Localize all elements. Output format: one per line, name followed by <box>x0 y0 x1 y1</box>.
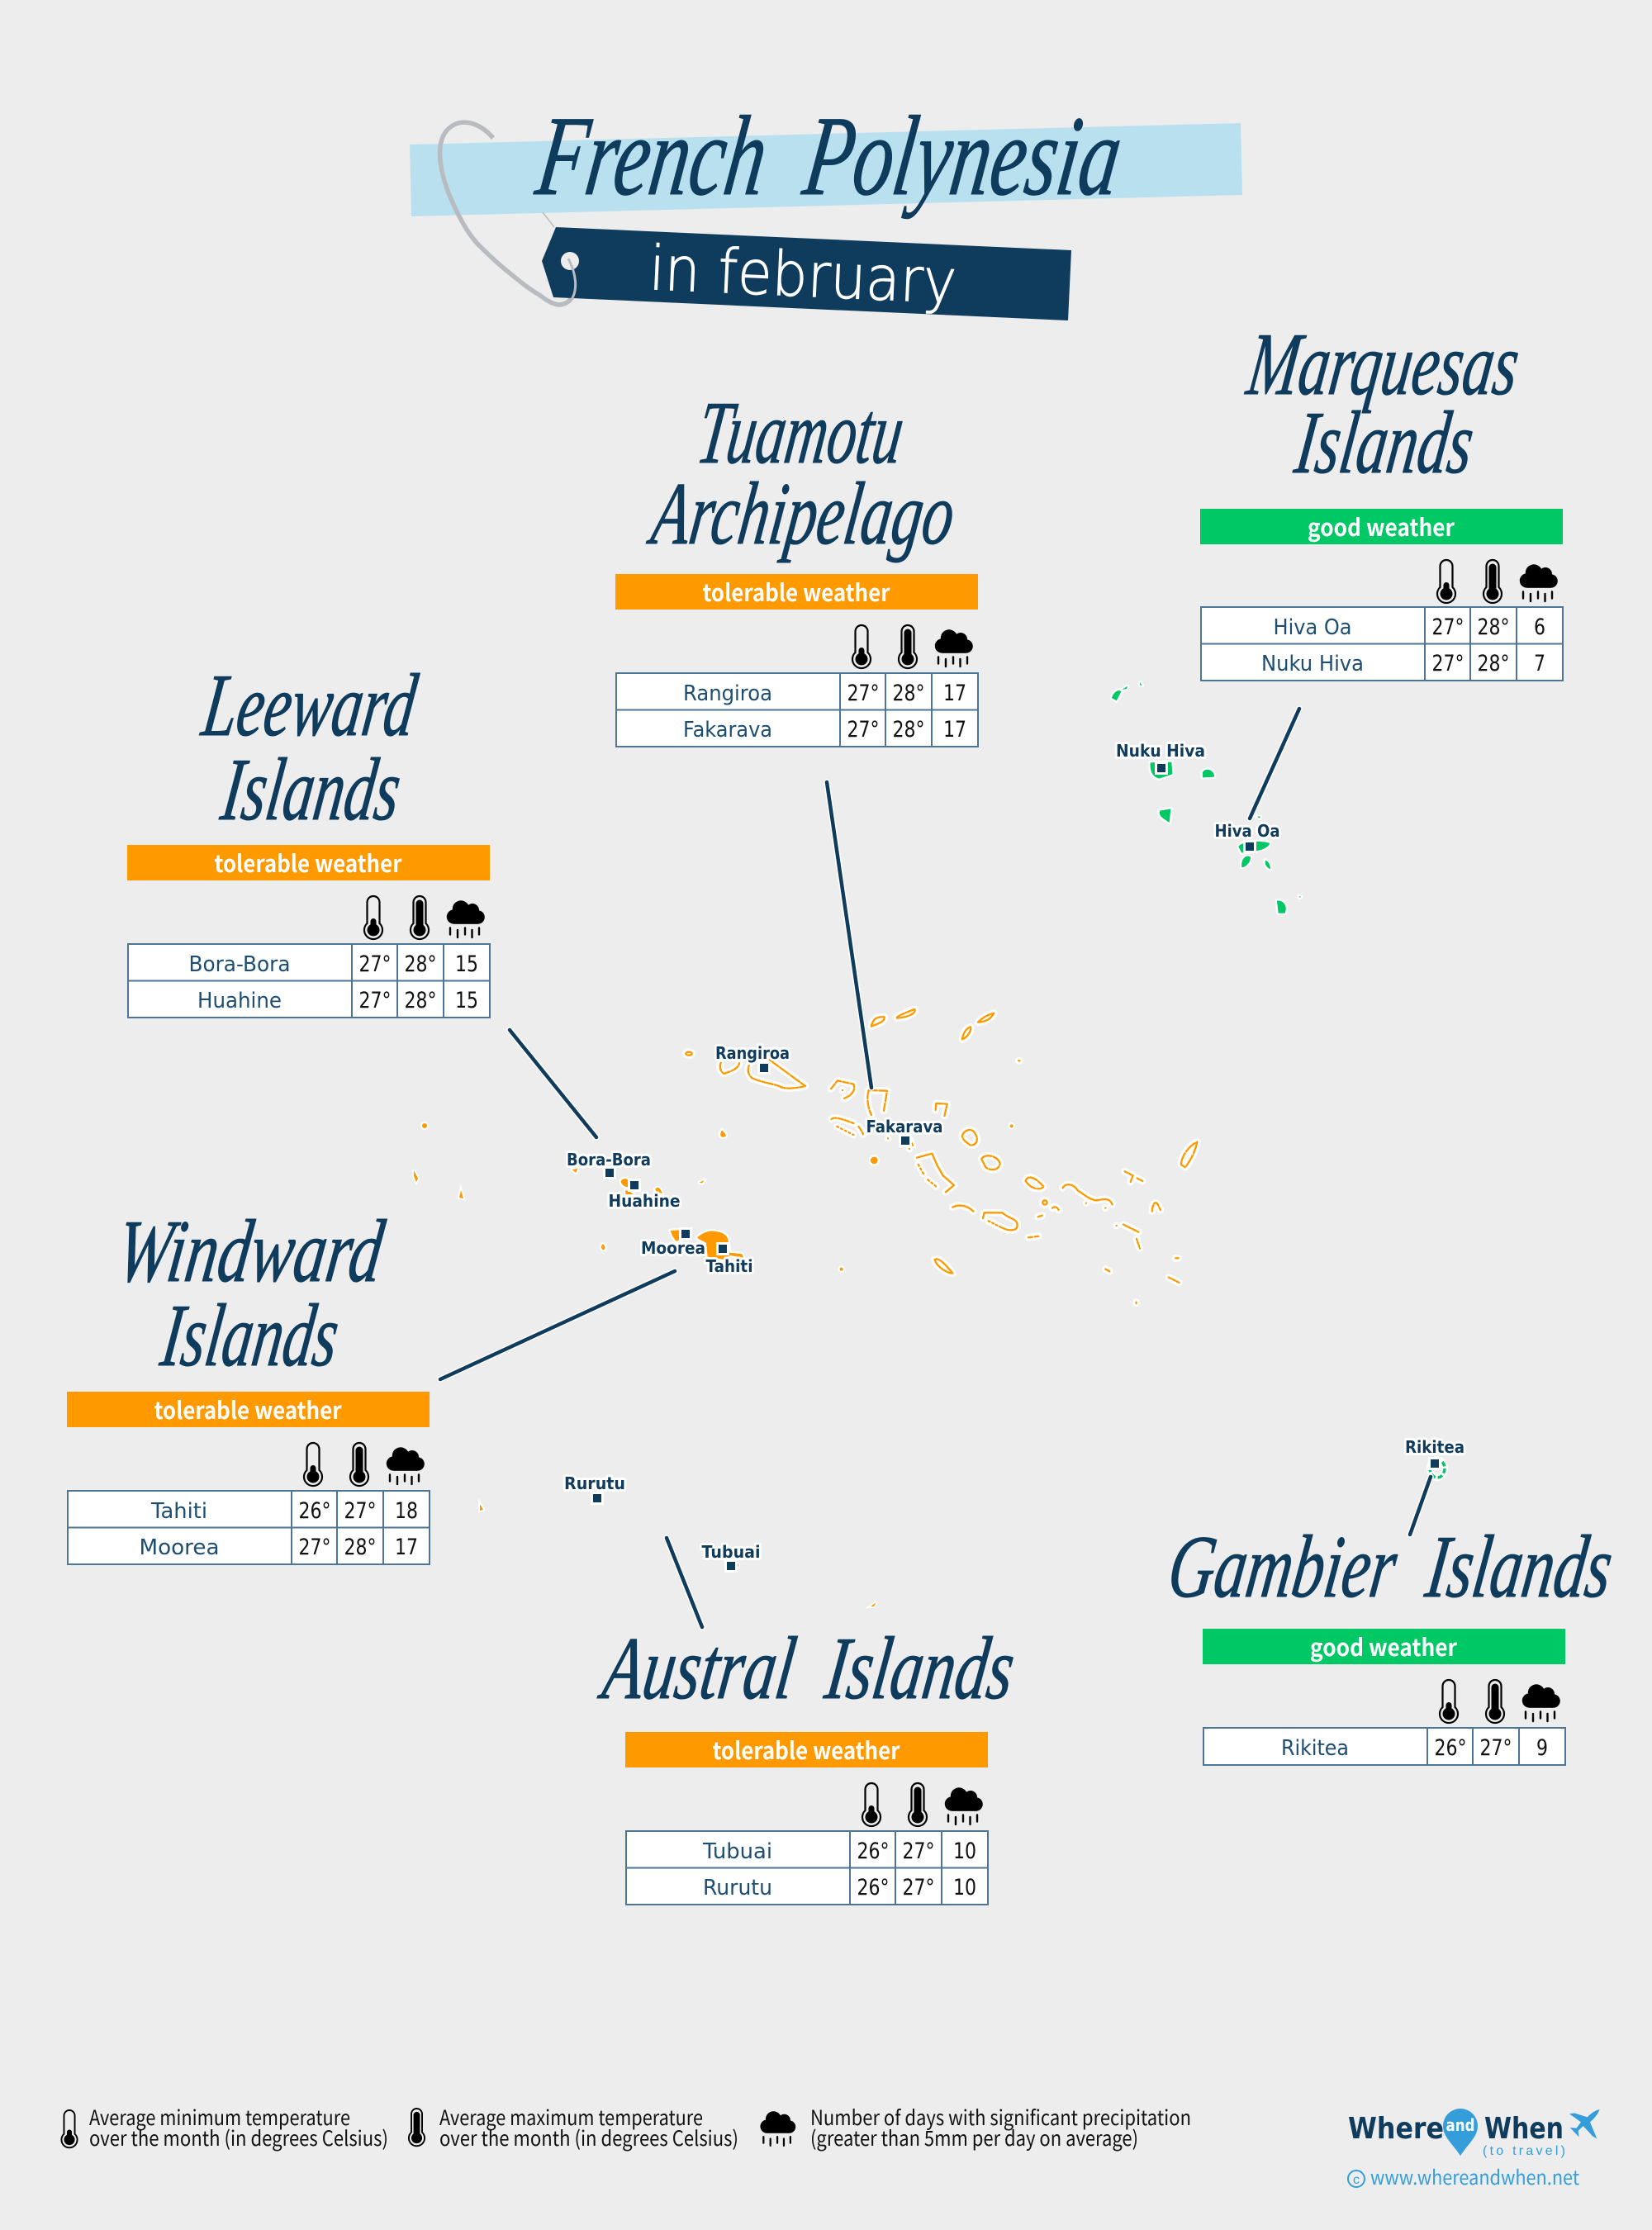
weather table: Rurutu <box>703 1876 772 1900</box>
heading: Tuamotu Archipelago <box>643 383 961 563</box>
leader line: Tuamotu <box>827 782 871 1088</box>
weather table: 27° <box>358 951 392 977</box>
icons: min temp, max temp, rain days <box>1440 1680 1560 1723</box>
logo: Where and When <box>1348 2109 1600 2190</box>
weather table: 27° <box>1480 1735 1512 1761</box>
logo: Where and When: and <box>1446 2115 1475 2135</box>
weather table: 27° <box>1432 614 1464 640</box>
map marker: Tahiti <box>705 1245 753 1276</box>
heading: Marquesas Islands: Islands <box>1289 393 1479 492</box>
heading: Windward Islands: Windward <box>112 1202 390 1301</box>
weather table: 10 <box>953 1839 976 1864</box>
weather banner <box>615 574 978 610</box>
icon: map pin <box>1443 2109 1478 2156</box>
subtitle tag <box>542 227 1071 320</box>
weather table <box>128 944 490 1018</box>
weather banner <box>625 1732 988 1767</box>
map marker: Rikitea: Rikitea <box>1405 1437 1464 1457</box>
map marker: Bora-Bora <box>567 1150 651 1177</box>
heading: Leeward Islands: Islands <box>216 740 406 839</box>
panel: Leeward Islands <box>127 656 490 1018</box>
map: Gambier islands <box>1430 1459 1445 1478</box>
weather banner: tolerable weather <box>712 1732 900 1767</box>
weather table <box>68 1491 430 1564</box>
map marker: Tubuai <box>702 1542 760 1570</box>
legend text: maximum temperature: over the month (in degrees Celsius) <box>439 2123 738 2152</box>
map marker: Rangiroa: Rangiroa <box>715 1043 790 1063</box>
icons: min temp, max temp, rain days <box>852 625 973 668</box>
leader line: Windward <box>440 1271 675 1379</box>
weather banner: tolerable weather <box>702 574 890 609</box>
map marker: Huahine: Huahine <box>608 1191 681 1211</box>
weather table: 18 <box>395 1498 418 1524</box>
heading: Tuamotu Archipelago: Archipelago <box>643 464 961 563</box>
weather banner: tolerable weather <box>215 845 402 880</box>
weather table: Bora-Bora <box>188 952 291 977</box>
legend text: precipitation days: (greater than 5mm per day on average) <box>810 2123 1138 2152</box>
leader line: Gambier <box>1410 1477 1431 1535</box>
title band <box>410 123 1242 216</box>
icons: min temp, max temp, rain days <box>304 1443 425 1486</box>
logo: Where and When: (to travel) <box>1483 2144 1565 2158</box>
map marker: Tahiti: Tahiti <box>705 1256 753 1276</box>
weather table <box>626 1831 988 1905</box>
website: c <box>1353 2173 1360 2187</box>
weather banner <box>1200 509 1563 544</box>
legend text: minimum temperature <box>89 2102 388 2152</box>
weather table: Tahiti <box>150 1499 207 1524</box>
legend text: maximum temperature <box>439 2102 738 2152</box>
leader line: Austral <box>667 1538 702 1627</box>
legend text: minimum temperature: over the month (in degrees Celsius) <box>89 2123 388 2152</box>
map marker: Rikitea <box>1405 1437 1464 1468</box>
map marker: Rurutu <box>564 1473 625 1502</box>
weather table: 27° <box>344 1498 377 1524</box>
weather table: 15 <box>455 988 478 1013</box>
weather table: 27° <box>902 1875 935 1900</box>
weather banner: tolerable weather <box>154 1392 342 1426</box>
map marker: Nuku Hiva <box>1116 741 1205 772</box>
legend <box>61 2102 1191 2152</box>
map: Tuamotu atolls and islands <box>686 1009 1197 1303</box>
legend text: precipitation days <box>810 2102 1191 2152</box>
weather table: 27° <box>358 988 392 1013</box>
title: French Polynesia <box>529 93 1129 219</box>
weather table: 28° <box>892 681 925 706</box>
weather table: 6 <box>1534 614 1545 640</box>
weather table: 28° <box>892 717 925 743</box>
weather banner: good weather <box>1308 509 1455 543</box>
map marker: Moorea: Moorea <box>641 1238 705 1258</box>
weather table: 17 <box>943 717 966 743</box>
weather table: 26° <box>299 1498 330 1524</box>
weather table: 9 <box>1536 1735 1548 1761</box>
map marker: Bora-Bora: Bora-Bora <box>567 1150 651 1170</box>
weather table: 28° <box>1477 651 1510 676</box>
map: outlying orange islands <box>414 1123 876 1606</box>
weather table: 7 <box>1534 651 1545 676</box>
legend text: minimum temperature: Average minimum temperature <box>89 2102 350 2132</box>
weather table: 17 <box>395 1535 418 1560</box>
weather table: Hiva Oa <box>1274 615 1351 640</box>
weather table <box>1201 607 1563 681</box>
leader line: Marquesas <box>1250 709 1299 818</box>
weather table: 27° <box>902 1839 935 1864</box>
panel: Gambier Islands <box>1163 1517 1618 1765</box>
map marker: Hiva Oa <box>1214 821 1280 851</box>
heading: Leeward Islands <box>196 656 423 839</box>
heading: Marquesas Islands: Marquesas <box>1241 315 1525 414</box>
icon: plane <box>1569 2109 1600 2138</box>
weather table: Nuku Hiva <box>1261 652 1364 676</box>
weather table: 26° <box>1434 1735 1467 1761</box>
weather table: 28° <box>1477 614 1510 640</box>
weather banner <box>127 845 490 880</box>
weather table: 26° <box>857 1875 889 1900</box>
map marker: Huahine <box>608 1181 681 1211</box>
weather table: 27° <box>1432 651 1464 676</box>
heading: Leeward Islands: Leeward <box>196 656 423 755</box>
weather table: Rikitea <box>1281 1736 1349 1761</box>
logo: Where and When: Where <box>1348 2112 1444 2146</box>
icon: minimum temperature <box>61 2110 78 2147</box>
heading: Windward Islands <box>112 1202 390 1385</box>
weather table: Tubuai <box>702 1839 772 1864</box>
map marker: Tubuai: Tubuai <box>702 1542 760 1562</box>
weather table: Fakarava <box>683 718 772 743</box>
map marker: Moorea <box>641 1230 705 1258</box>
map: Society islands <box>572 1130 743 1260</box>
weather table: Moorea <box>139 1535 220 1560</box>
icon: maximum temperature <box>409 2109 425 2146</box>
heading: Marquesas Islands <box>1241 315 1525 492</box>
weather table <box>616 673 978 747</box>
icons: min temp, max temp, rain days <box>364 896 485 939</box>
panel: Marquesas Islands <box>1200 315 1563 681</box>
weather table: 27° <box>847 681 879 706</box>
weather table <box>1203 1728 1565 1765</box>
legend text: maximum temperature: Average maximum temperature <box>439 2102 703 2132</box>
website: www.whereandwhen.net <box>1370 2161 1579 2190</box>
map marker: Rangiroa <box>715 1043 790 1072</box>
legend text: precipitation days: Number of days with significant precipitation <box>810 2102 1191 2132</box>
weather table: 27° <box>847 717 879 743</box>
weather table: 28° <box>405 951 436 977</box>
panel: Tuamotu Archipelago <box>615 383 978 747</box>
weather table: 28° <box>344 1535 377 1560</box>
map: Marquesas islands <box>1112 682 1301 913</box>
weather table: 28° <box>405 988 436 1013</box>
weather table: Rangiroa <box>683 681 772 706</box>
weather table: Huahine <box>197 989 282 1013</box>
weather table: 17 <box>943 681 966 706</box>
subtitle tag: in february <box>648 233 958 318</box>
map marker: Hiva Oa: Hiva Oa <box>1214 821 1280 841</box>
weather table: 10 <box>953 1875 976 1900</box>
leader line: Leeward <box>510 1030 596 1137</box>
logo: Where and When: When <box>1484 2112 1564 2146</box>
panel: Windward Islands <box>67 1202 430 1564</box>
tag string <box>440 122 575 305</box>
weather banner: good weather <box>1310 1629 1457 1663</box>
heading: Windward Islands: Islands <box>155 1286 344 1385</box>
panel: Austral Islands <box>594 1619 1020 1905</box>
weather table: 15 <box>455 951 478 977</box>
icons: min temp, max temp, rain days <box>1437 560 1558 603</box>
weather table: 27° <box>299 1535 330 1560</box>
map marker: Rurutu: Rurutu <box>564 1473 625 1493</box>
weather banner <box>1203 1629 1565 1664</box>
heading: Austral Islands: Austral Islands <box>594 1619 1020 1718</box>
map marker: Fakarava <box>866 1117 943 1145</box>
map marker: Fakarava: Fakarava <box>866 1117 943 1136</box>
weather table: 26° <box>857 1839 889 1864</box>
map marker: Nuku Hiva: Nuku Hiva <box>1116 741 1205 761</box>
weather banner <box>67 1392 430 1427</box>
icon: precipitation days <box>760 2111 795 2146</box>
icons: min temp, max temp, rain days <box>862 1783 983 1826</box>
heading: Tuamotu Archipelago: Tuamotu <box>692 383 909 482</box>
